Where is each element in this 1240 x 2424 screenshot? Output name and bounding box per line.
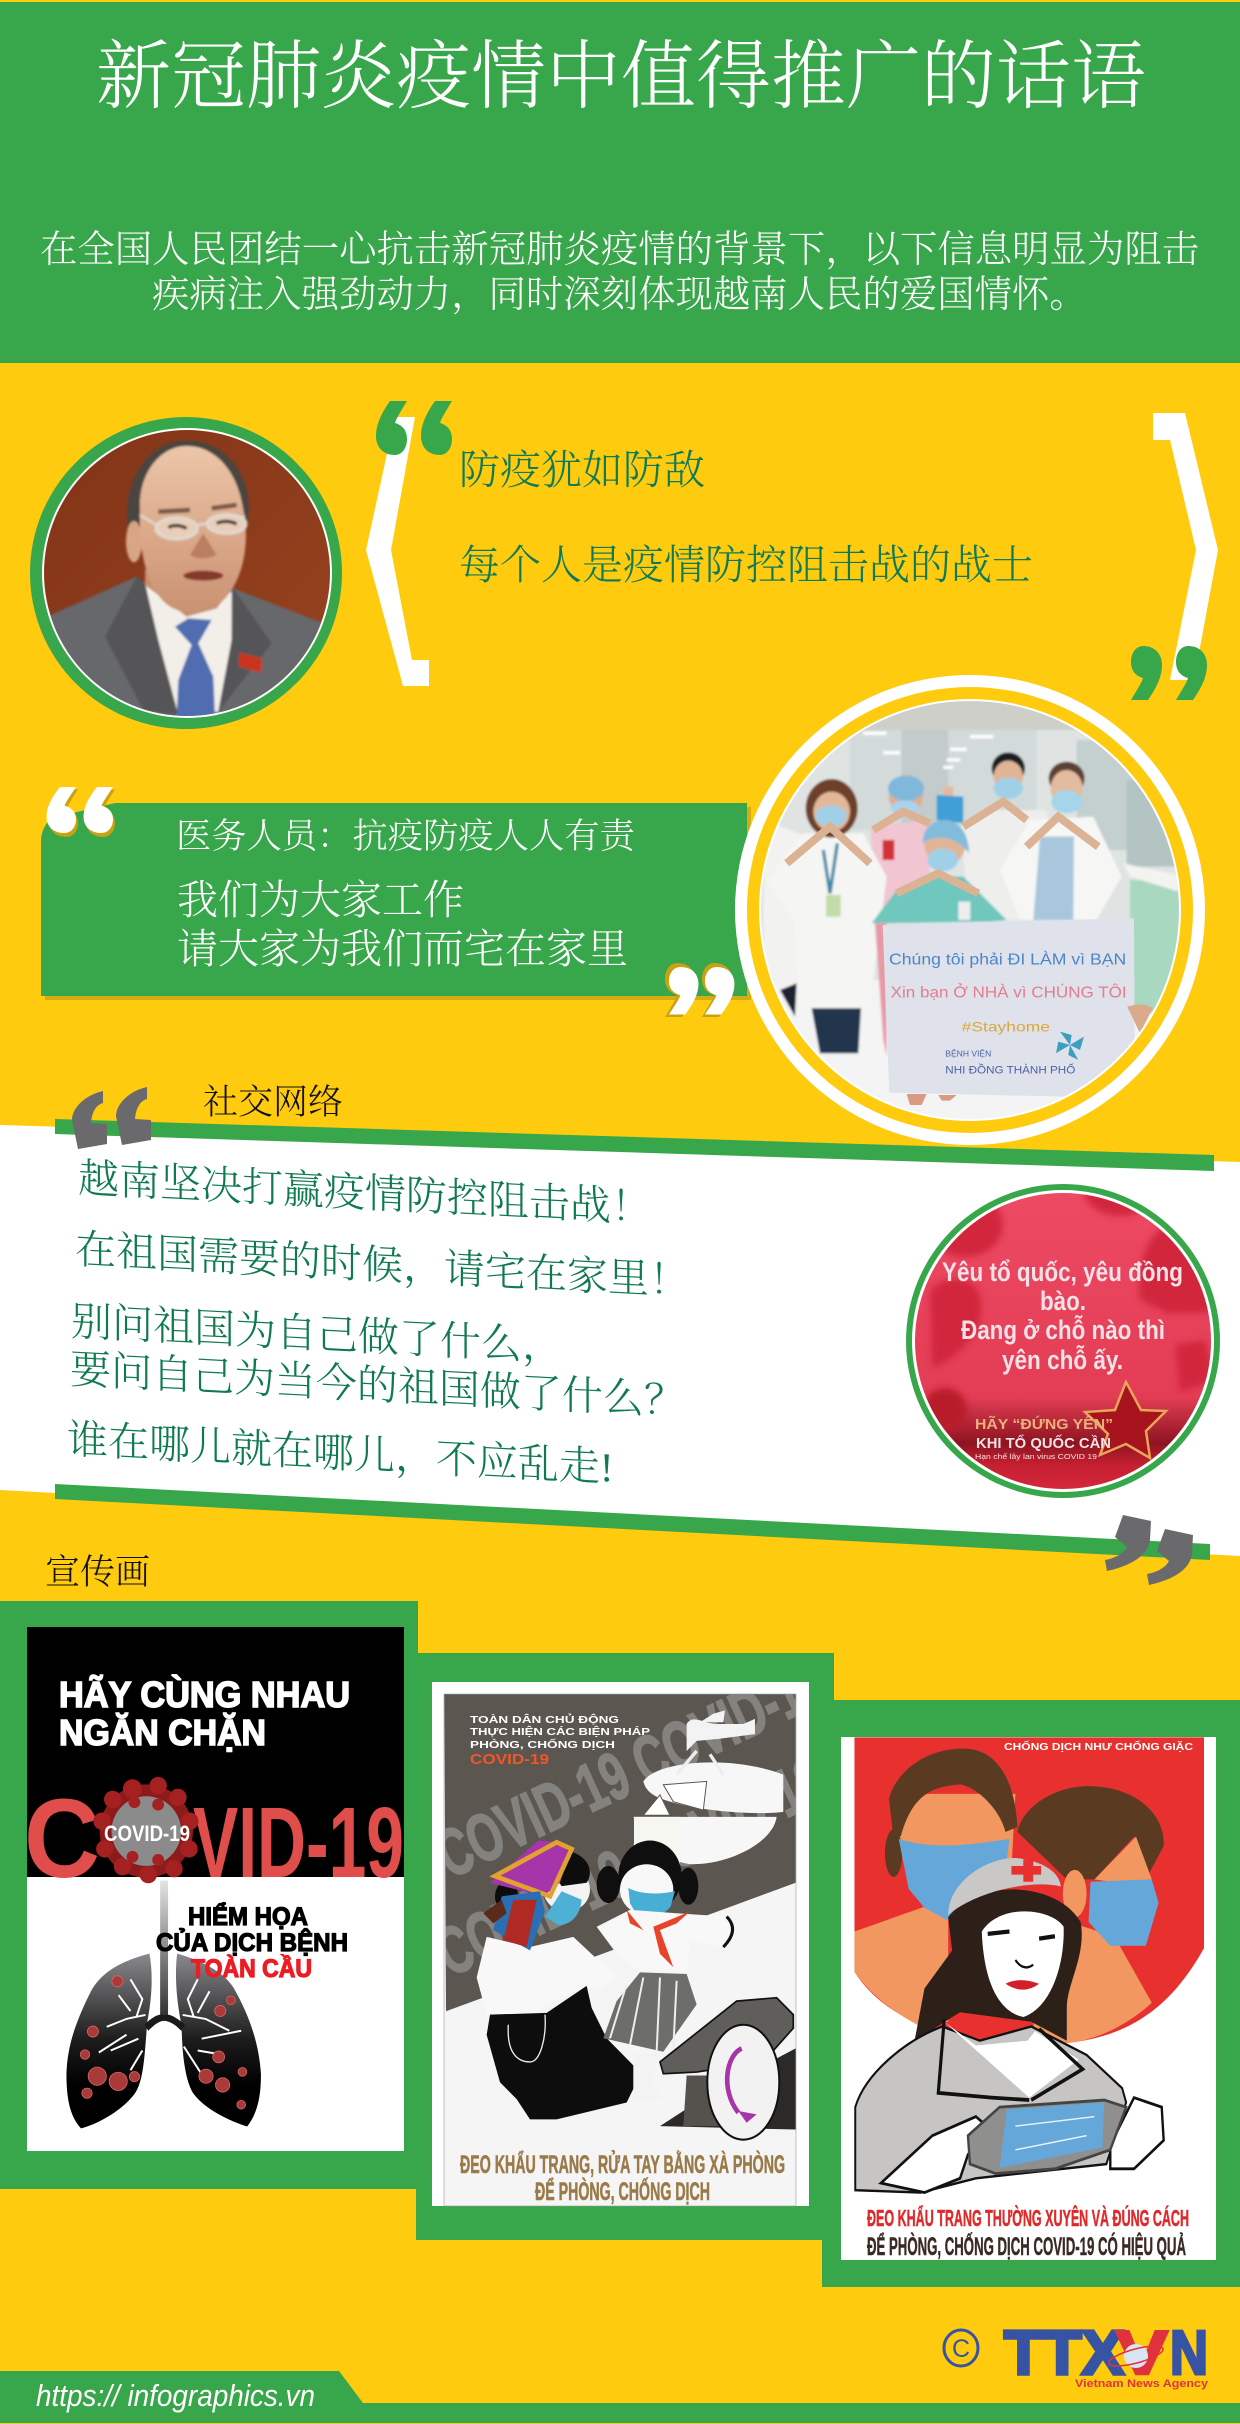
icon: copyright ring [944, 2330, 978, 2366]
staff text [176, 817, 637, 972]
logo: TTXVN: N [1170, 2319, 1208, 2388]
poster text [942, 1257, 1183, 1461]
poster text: bào. [1040, 1286, 1086, 1316]
poster 1: lungs: HÃY CÙNG NHAU [59, 1673, 350, 1715]
left bracket [366, 417, 429, 686]
nurse face [982, 1911, 1064, 2017]
logo: TTXVN: V [1116, 2319, 1168, 2388]
quote box [41, 803, 747, 996]
icon: opening quote grey [72, 1087, 151, 1149]
virus [93, 1777, 198, 1883]
poster 1: lungs: HIỂM HỌA [188, 1902, 308, 1931]
poster text: Đang ở chỗ nào thì [961, 1314, 1165, 1345]
panel: medical staff quote [41, 675, 1205, 1145]
held mask [968, 2100, 1126, 2174]
trachea [160, 1881, 168, 2015]
quote text: 每个人是疫情防控阻击战的战士 [459, 542, 1033, 588]
sign: BỆNH VIỆN [945, 1049, 991, 1059]
poster text: Hạn chế lây lan virus COVID 19 [975, 1452, 1097, 1461]
panel: prime minister quote [30, 401, 1218, 729]
icon: closing quote white [665, 963, 734, 1017]
section heading: 宣传画 [45, 1553, 150, 1592]
social lines: 要问自己为当今的祖国做了什么？ [70, 1346, 685, 1424]
poster 1: lungs: TOÀN CẦU [191, 1954, 312, 1983]
icon: opening quote white [47, 787, 115, 837]
nurse cap [948, 1858, 1061, 1915]
green blocks [0, 1601, 1240, 2287]
nurse hair [915, 1889, 1082, 2041]
sign: NHI ĐỒNG THÀNH PHỐ [945, 1062, 1075, 1076]
poster text: Yêu tổ quốc, yêu đồng [942, 1257, 1183, 1287]
social lines: 谁在哪儿就在哪儿，不应乱走! [67, 1416, 613, 1491]
poster 1: lungs: COVID-19 [104, 1821, 190, 1846]
portrait frame [30, 417, 342, 729]
washing hands [643, 1762, 783, 1813]
icon: closing quote green [1131, 646, 1207, 700]
portrait photo [40, 425, 335, 725]
poster 2: mother and child: TOÀN DÂN CHỦ ĐỘNG [470, 1713, 619, 1726]
social lines [67, 1155, 690, 1491]
icon: closing quote grey [1105, 1515, 1193, 1585]
header panel [0, 2, 1240, 363]
icon: star [1085, 1382, 1166, 1458]
photo ring [735, 675, 1205, 1145]
lungs [66, 1954, 152, 2128]
footer url: https:// infographics.vn [36, 2378, 315, 2413]
poster 2: mother and child: COVID-19 COVID-19 [425, 1743, 837, 1991]
stool and hat [660, 2048, 796, 2130]
woman [477, 1937, 617, 2018]
image: red circle poster [906, 1164, 1220, 1498]
staff photo [757, 700, 1183, 1123]
intro text: 在全国人民团结一心抗击新冠肺炎疫情的背景下，以下信息明显为阻击 [40, 229, 1199, 271]
intro text: 疾病注入强劲动力，同时深刻体现越南人民的爱国情怀。 [152, 274, 1087, 316]
poster 1: lungs: VID-19 [193, 1787, 404, 1899]
poster 2: mother and child: THỰC HIỆN CÁC BIỆN PHÁP [470, 1725, 650, 1738]
poster 3: nurse holding mask [841, 1737, 1216, 2261]
logo: TTXVN: Vietnam News Agency [1075, 2378, 1209, 2390]
staff text: 医务人员：抗疫防疫人人有责 [176, 817, 637, 856]
poster text: HÃY “ĐỨNG YÊN” [975, 1415, 1113, 1433]
raised arms [787, 802, 1098, 893]
panel: social network [0, 1083, 1240, 1585]
intro text [40, 229, 1199, 316]
poster 2: mother and child: ĐEO KHẨU TRANG, RỬA TAY BẰNG XÀ PHÒNG [460, 2149, 785, 2179]
men [854, 1898, 948, 2026]
quote text [459, 447, 1033, 588]
social lines: 在祖国需要的时候，请宅在家里！ [75, 1226, 690, 1304]
poster 1: lungs: NGĂN CHẶN [59, 1712, 266, 1753]
icon: opening quote green [376, 401, 452, 455]
panel: posters section [0, 1553, 1240, 2287]
poster 2: mother and child: COVID-19 [470, 1751, 549, 1768]
footer bar [0, 2371, 1240, 2423]
poster text: yên chỗ ấy. [1002, 1344, 1123, 1375]
poster 1: lungs: C [24, 1776, 100, 1901]
sign [883, 918, 1153, 1105]
logo: TTXVN [944, 2319, 1209, 2390]
white band [0, 1125, 1240, 1556]
band bottom bar [55, 1484, 1210, 1560]
staff text: 请大家为我们而宅在家里 [177, 926, 628, 972]
poster text: KHI TỔ QUỐC CẦN [976, 1434, 1111, 1452]
staff text: 我们为大家工作 [177, 877, 464, 923]
title: 新冠肺炎疫情中值得推广的话语 [96, 36, 1146, 119]
sign: Chúng tôi phải ĐI LÀM vì BẠN [889, 951, 1126, 968]
poster 2: mother and child: ĐỂ PHÒNG, CHỐNG DỊCH [535, 2176, 710, 2206]
poster 2: mother and child: COVID-19 COVID-19 [425, 1645, 837, 1893]
social lines: 越南坚决打赢疫情防控阻击战！ [78, 1155, 652, 1231]
poster 1: lungs: CỦA DỊCH BỆNH [156, 1927, 348, 1957]
logo: TTXVN: TTX [1004, 2319, 1124, 2388]
girl [618, 1841, 682, 1912]
band top bar [55, 1119, 1214, 1171]
right bracket [1153, 413, 1218, 680]
sign: #Stayhome [962, 1019, 1050, 1035]
hands [881, 2117, 990, 2193]
poster 3: nurse holding mask: CHỐNG DỊCH NHƯ CHỐNG GIẶC [1004, 1739, 1193, 1753]
quote box shadow [45, 807, 751, 1000]
sign: Xin bạn Ở NHÀ vì CHÚNG TÔI [891, 984, 1127, 1002]
poster 2: mother and child [432, 1682, 809, 2206]
nurse uniform [855, 2026, 1126, 2193]
icon: copyright ring: C [952, 2335, 970, 2363]
social lines: 别问祖国为自己做了什么， [71, 1298, 563, 1370]
poster 1: lungs [24, 1627, 404, 2151]
section heading: 社交网络 [203, 1083, 343, 1122]
poster 2: mother and child: PHÒNG, CHỐNG DỊCH [470, 1737, 615, 1751]
quote text: 防疫犹如防敌 [459, 447, 705, 493]
